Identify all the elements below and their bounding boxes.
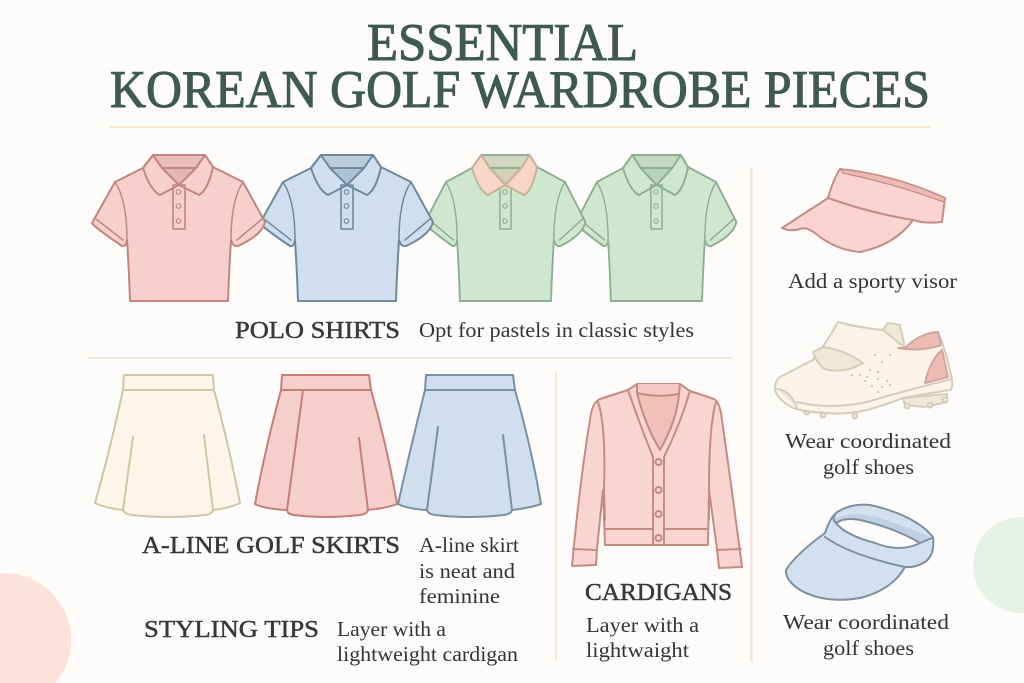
panel: accessories: golf shoes [823,636,914,660]
icon: pink polo [92,155,265,301]
icon: pink skirt [255,375,397,517]
panel: a-line skirts [95,375,541,608]
panel: a-line skirts: feminine [419,584,500,608]
icon: pink visor [782,169,945,252]
cardigans caption: Layer with a [586,613,700,637]
polo caption: Opt for pastels in classic styles [419,318,694,342]
cardigans heading: CARDIGANS [585,580,732,606]
icon: blue visor [786,505,933,600]
skirts caption: A-line skirt [419,533,519,557]
icon: green polo plain [576,155,736,301]
panel: cardigans: lightwaight [586,638,689,662]
icon: shoe perforations [851,354,891,393]
icon: golf shoe [775,322,952,418]
panel: styling tips [144,617,519,666]
visor caption: Add a sporty visor [788,269,957,293]
icon: cream skirt [95,375,240,517]
panel: accessories: golf shoes [823,455,914,479]
panel: accessories [775,169,957,660]
shoe caption: Wear coordinated [785,429,952,453]
panel: styling tips: lightweight cardigan [337,642,519,666]
title [110,14,930,119]
panel: cardigans [572,384,742,662]
icon: blue polo [260,155,433,301]
panel: a-line skirts: is neat and [419,559,516,583]
icon: blue skirt [398,375,541,517]
skirts heading: A-LINE GOLF SKIRTS [142,533,400,559]
panel: polo shirts [92,155,736,344]
blue visor caption: Wear coordinated [783,610,950,634]
polo heading: POLO SHIRTS [235,318,400,344]
icon: cardigan [572,384,742,568]
styling caption: Layer with a [337,617,447,641]
styling heading: STYLING TIPS [144,617,319,643]
title: ESSENTIAL [367,14,638,72]
title: KOREAN GOLF WARDROBE PIECES [110,61,930,119]
icon: green polo with peach collar [425,155,585,301]
